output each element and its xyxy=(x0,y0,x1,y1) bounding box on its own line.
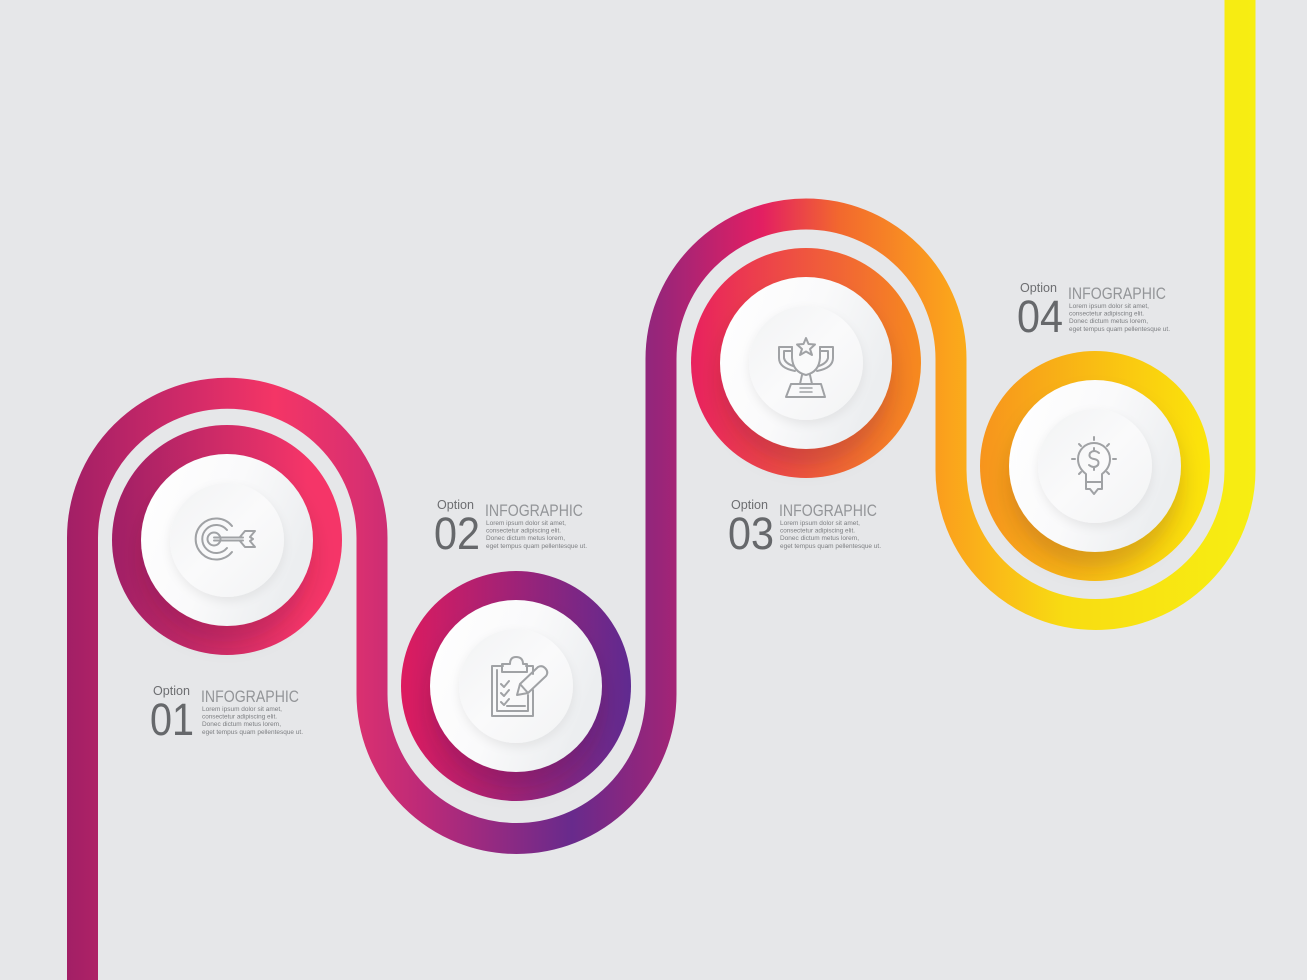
text block: option 01: Donec dictum metus lorem, xyxy=(202,721,281,728)
text block: option 02: consectetur adipiscing elit. xyxy=(486,528,561,534)
text block: option 04 xyxy=(1017,281,1170,342)
icon: target with arrow xyxy=(196,519,255,560)
text block: option 03: INFOGRAPHIC xyxy=(779,502,877,520)
text block: option 04: Option xyxy=(1020,281,1057,295)
text block: option 03: consectetur adipiscing elit. xyxy=(780,528,855,534)
step 3 circle xyxy=(691,248,921,478)
text block: option 01: Lorem ipsum dolor sit amet, xyxy=(202,706,282,713)
text block: option 01: consectetur adipiscing elit. xyxy=(202,714,277,720)
text block: option 04: INFOGRAPHIC xyxy=(1068,285,1166,303)
text block: option 01 xyxy=(150,684,303,745)
text block: option 02: Option xyxy=(437,498,474,512)
text block: option 01: Option xyxy=(153,684,190,698)
icon: trophy xyxy=(779,338,833,397)
text block: option 02: 02 xyxy=(434,508,480,559)
icon: light bulb with dollar xyxy=(1072,437,1116,494)
text block: option 03: Donec dictum metus lorem, xyxy=(780,535,859,542)
text block: option 04: consectetur adipiscing elit. xyxy=(1069,310,1144,318)
text block: option 03 xyxy=(728,498,881,559)
text block: option 03: eget tempus quam pellentesque ut. xyxy=(780,543,881,550)
text block: option 04: 04 xyxy=(1017,291,1063,342)
text block: option 01: eget tempus quam pellentesque ut. xyxy=(202,729,303,736)
text block: option 04: Lorem ipsum dolor sit amet, xyxy=(1069,303,1149,310)
text block: option 04: Donec dictum metus lorem, xyxy=(1069,318,1148,325)
step 1 circle xyxy=(112,425,342,655)
step 4 circle xyxy=(980,351,1210,581)
text block: option 02: Lorem ipsum dolor sit amet, xyxy=(486,520,566,527)
icon: clipboard with pen xyxy=(492,657,547,716)
text block: option 04: eget tempus quam pellentesque ut. xyxy=(1069,326,1170,333)
text block: option 02: Donec dictum metus lorem, xyxy=(486,535,565,542)
text block: option 03: Lorem ipsum dolor sit amet, xyxy=(780,520,860,527)
text block: option 03: 03 xyxy=(728,508,774,559)
text block: option 01: INFOGRAPHIC xyxy=(201,688,299,706)
text block: option 01: 01 xyxy=(150,694,194,745)
text block: option 03: Option xyxy=(731,498,768,512)
text block: option 02: INFOGRAPHIC xyxy=(485,502,583,520)
text block: option 02: eget tempus quam pellentesque ut. xyxy=(486,543,587,550)
step 2 circle xyxy=(401,571,631,801)
text block: option 02 xyxy=(434,498,587,559)
